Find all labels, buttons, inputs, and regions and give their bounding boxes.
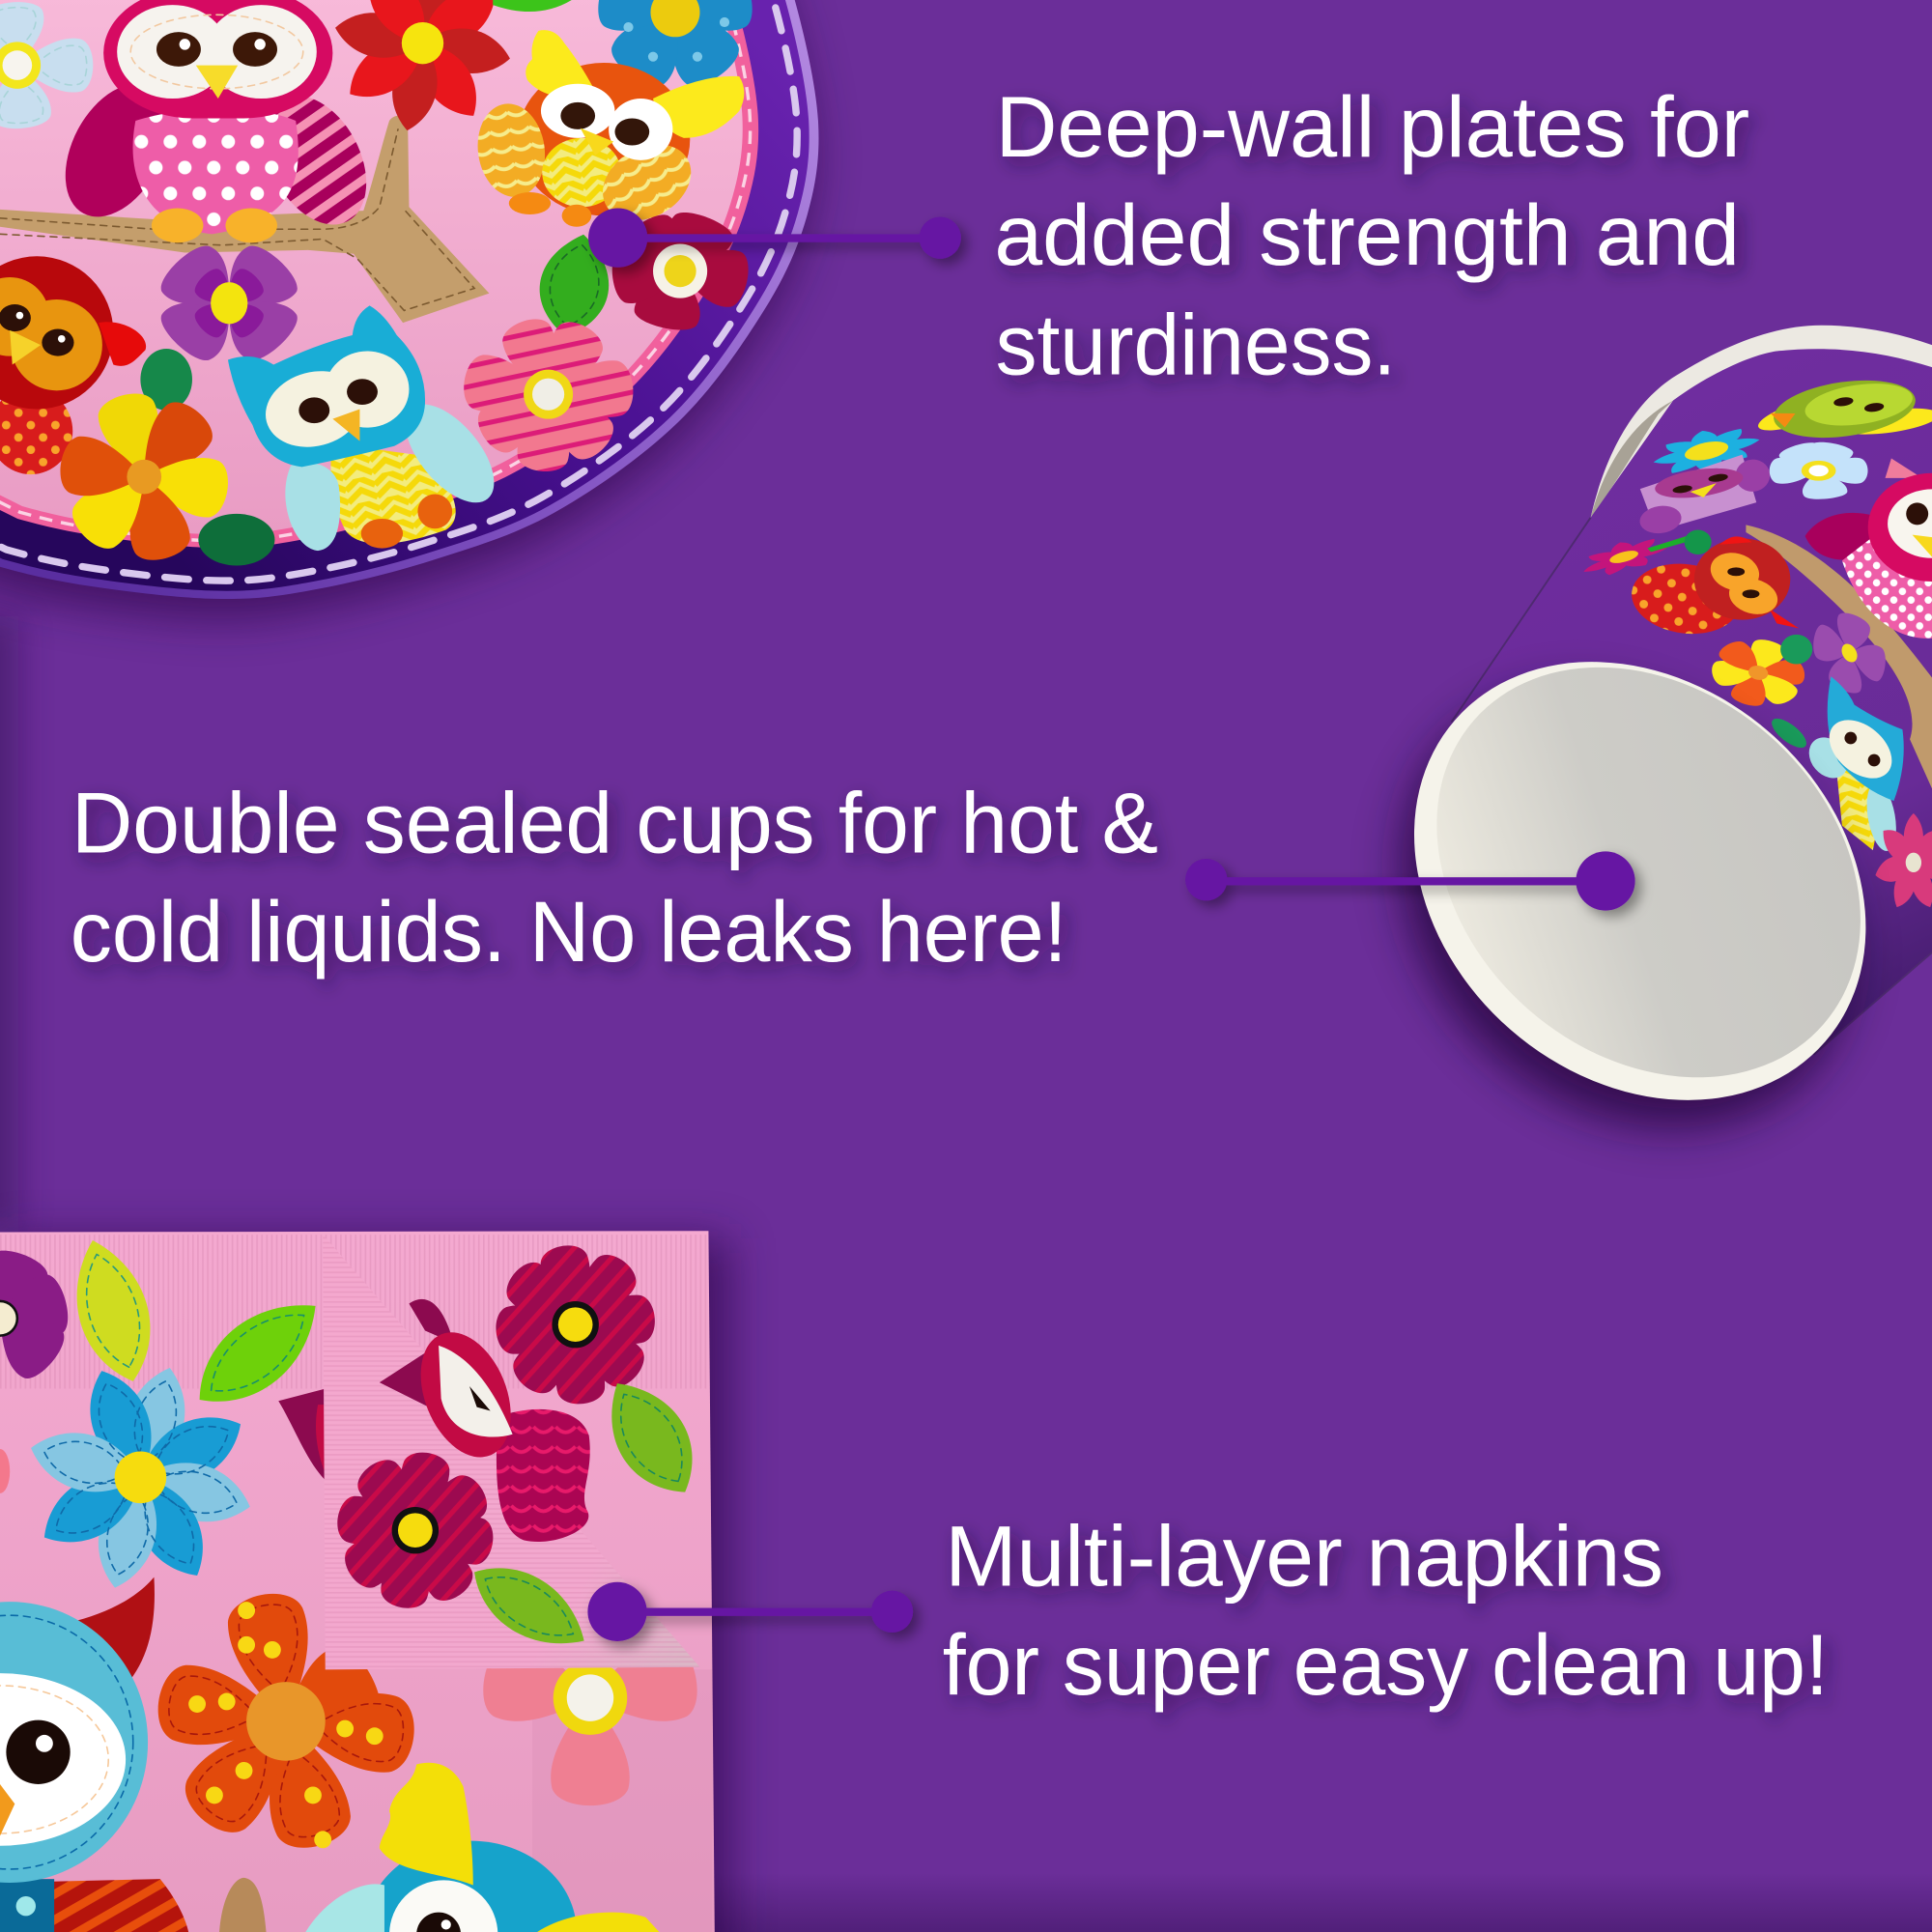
connector: plate [588,209,961,268]
cup base interior [1354,582,1932,1162]
cup pink owl [1805,458,1932,639]
cup blue owl [1801,676,1904,853]
plate drop shadow [0,0,813,618]
callout: plates [994,78,1749,393]
napkin lower right panel [532,1669,712,1932]
plate purple border [0,0,810,591]
plate pink field [0,0,743,534]
blue flower [592,0,758,95]
pink flower [476,1637,703,1805]
cup orange flower [1703,629,1813,716]
connector: cup [1185,851,1635,911]
maroon flower [610,206,753,335]
small pink flower edge [0,1449,10,1493]
top right flower [496,1245,655,1405]
orange polka flower [153,1587,418,1856]
background left shade [0,616,18,1233]
branch [0,116,489,323]
flap flower [337,1453,493,1608]
yellow orange owl [471,30,744,236]
cup lip [1591,326,1932,518]
plate pink band [0,0,758,548]
pink striped flower [464,319,634,471]
cup purple flower [1798,598,1901,708]
cup body [1452,349,1932,1055]
green leaf on fold [588,1365,714,1511]
napkin folded flap [323,1235,699,1669]
cup blue flower [1649,419,1764,482]
plate with owl print [0,0,818,618]
purple flower [153,239,305,367]
callout: plates: added strength and [994,186,1740,283]
flap ribbing [323,1235,699,1669]
cup with owl print [1312,326,1932,1219]
green round [198,514,274,565]
cup pale flower [1770,440,1868,501]
blue flower [24,1360,257,1594]
background bottom shade [0,1873,1932,1932]
cup lip inner shading [1591,401,1673,518]
brown branch stub [219,1878,267,1932]
callout: cups [71,775,1158,980]
plate band stitches [0,0,751,541]
green oval leaf [140,349,192,411]
red owl [0,256,146,474]
cup green owl [1751,369,1932,451]
bright green leaf [179,1280,336,1426]
light blue flower [0,0,93,130]
napkin connector dots and line [587,1582,913,1641]
napkin base [0,1231,715,1932]
callout: plates: sturdiness. [996,297,1396,393]
green leaf [531,229,617,342]
top green leaf [493,0,579,12]
pink owl [44,0,387,242]
cup branch [1746,525,1932,788]
purple flower [0,1244,73,1386]
cup connector dots and line [1185,851,1635,911]
cup purple owl [1633,451,1776,536]
napkin shadow [0,1238,729,1932]
callout: napkins: for super easy clean up! [943,1616,1829,1713]
cup side edges [1452,518,1932,1055]
cup magenta flower [1576,530,1672,583]
cup base shadow [1312,600,1932,1219]
red flower [331,0,514,134]
plate rim stitches [0,0,797,581]
cup red owl [1627,536,1799,640]
napkin top ribbing [0,1235,708,1389]
cup pink flower [1873,813,1932,912]
folded owl [380,1299,590,1542]
blue owl [228,305,510,551]
callout: napkins: Multi-layer napkins [945,1508,1663,1605]
napkin with owl print [0,1231,729,1932]
plate outer rim [0,0,818,599]
callout: cups: cold liquids. No leaks here! [71,883,1067,980]
flap leaf [459,1548,599,1665]
blue owl at bottom [305,1763,659,1932]
cup base rim [1325,571,1932,1191]
callout: napkins [943,1508,1829,1713]
cup stem and leaf [1647,529,1712,554]
dark tuft behind fold [278,1387,330,1485]
yellow green leaf [60,1231,166,1391]
callout: cups: Double sealed cups for hot & [71,775,1158,871]
orange and yellow flower [56,387,232,566]
cup green dots [1767,635,1812,753]
connector: napkin [587,1582,913,1641]
plate connector dots and line [588,209,961,268]
large teal owl [0,1577,188,1932]
callout: plates: Deep-wall plates for [996,78,1749,175]
